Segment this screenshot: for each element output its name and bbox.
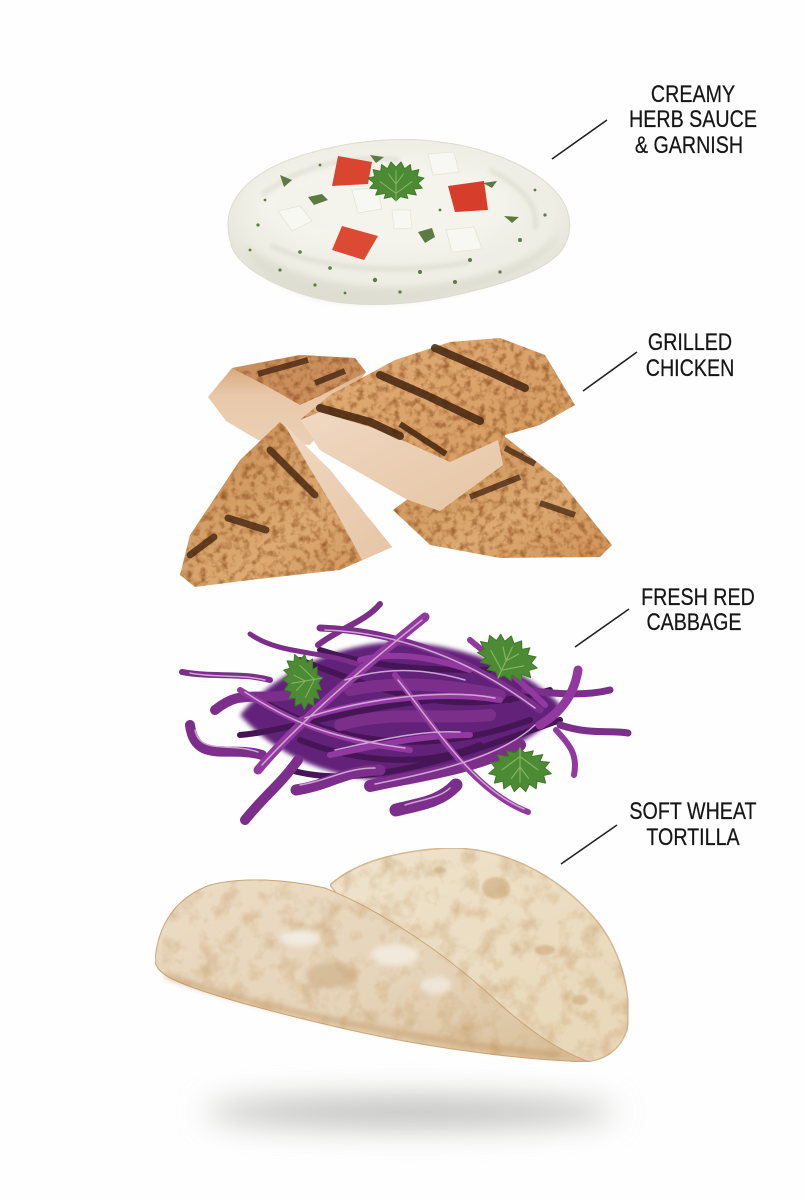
label: grilled chicken (583, 328, 734, 391)
cabbage shreds, pale (190, 620, 535, 809)
onion cubes (278, 152, 482, 252)
chicken piece: front left (180, 422, 392, 587)
ingredient: creamy herb sauce and garnish (228, 139, 570, 305)
tortilla front half (155, 880, 590, 1062)
ground shadow (205, 1097, 615, 1127)
chicken piece: center (300, 338, 575, 511)
ingredient: fresh red cabbage (182, 604, 628, 820)
chicken piece: back left (208, 355, 366, 445)
cilantro garnish (368, 162, 424, 201)
cabbage mass (240, 642, 560, 782)
label: fresh red cabbage: FRESH RED (641, 583, 755, 610)
label: fresh red cabbage (575, 583, 755, 647)
label: grilled chicken: CHICKEN (646, 354, 734, 381)
chicken piece: bottom right (393, 435, 612, 558)
tortilla back half (330, 848, 628, 1062)
label: creamy herb sauce and garnish: HERB SAUCE (629, 105, 757, 132)
label: grilled chicken: GRILLED (648, 328, 732, 355)
label: creamy herb sauce and garnish (552, 80, 757, 159)
label: soft wheat tortilla (561, 797, 757, 864)
cilantro leaves (279, 650, 327, 712)
ingredient: soft wheat tortilla (155, 848, 628, 1062)
sauce swirl shading (262, 159, 536, 269)
label: fresh red cabbage: CABBAGE (646, 608, 742, 635)
tomato cubes (332, 156, 372, 186)
label: creamy herb sauce and garnish: CREAMY (651, 80, 735, 107)
label: creamy herb sauce and garnish: & GARNISH (635, 131, 743, 158)
herb flecks (249, 155, 547, 294)
cabbage shreds, bright (240, 617, 578, 812)
cabbage shreds, medium (182, 604, 628, 820)
label: soft wheat tortilla: SOFT WHEAT (629, 797, 757, 824)
ingredient: grilled chicken (180, 338, 612, 587)
label: soft wheat tortilla: TORTILLA (646, 823, 740, 850)
cabbage shreds, dark (240, 650, 560, 776)
